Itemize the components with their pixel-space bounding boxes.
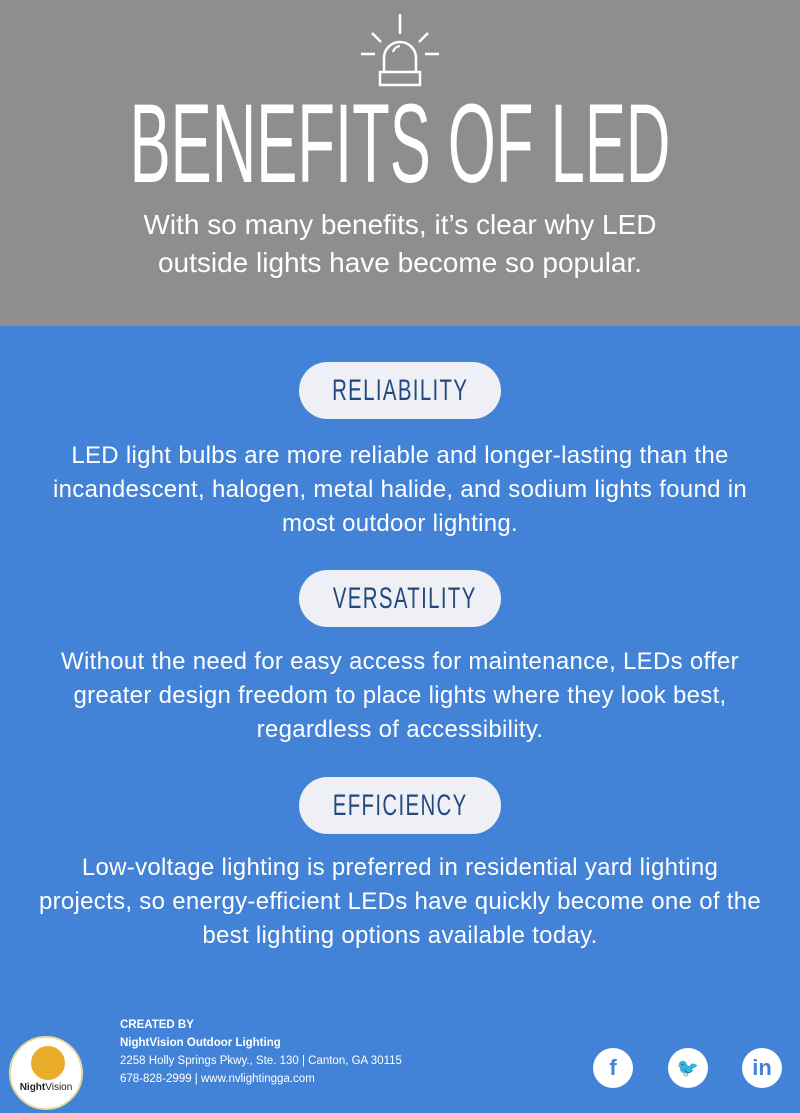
text: reliability: incandescent, halogen, metal halide, and sodium lights found in — [53, 476, 747, 503]
footer credits — [120, 1019, 402, 1085]
text: efficiency — [39, 854, 761, 949]
text: reliability: LED light bulbs are more reliable and longer-lasting than the — [71, 442, 729, 469]
footer credits: CREATED BY — [120, 1019, 194, 1031]
header panel — [0, 0, 800, 326]
icon: linkedin: in — [752, 1055, 772, 1080]
logo: NightVision: NightVision — [20, 1082, 72, 1093]
pill: versatility: VERSATILITY — [333, 582, 477, 615]
icon: facebook — [593, 1048, 633, 1088]
icon: linkedin — [742, 1048, 782, 1088]
pill: efficiency — [299, 777, 501, 834]
title: BENEFITS OF LED — [130, 81, 670, 206]
pill: reliability — [299, 362, 501, 419]
text: efficiency: Low-voltage lighting is preferred in residential yard lighting — [82, 854, 718, 881]
icon: siren light — [361, 14, 439, 86]
footer credits: 678-828-2999 | www.nvlightingga.com — [120, 1073, 315, 1085]
subtitle: outside lights have become so popular. — [158, 247, 642, 278]
pill: efficiency: EFFICIENCY — [333, 789, 467, 822]
pill: versatility — [299, 570, 501, 627]
text: versatility — [61, 648, 739, 743]
logo: NightVision — [9, 1036, 83, 1110]
text: efficiency: best lighting options available today. — [202, 922, 598, 949]
icon: twitter: 🐦 — [677, 1058, 699, 1078]
text: versatility: Without the need for easy access for maintenance, LEDs offer — [61, 648, 739, 675]
text: efficiency: projects, so energy-efficient LEDs have quickly become one of the — [39, 888, 761, 915]
icon: facebook: f — [609, 1055, 617, 1080]
icon: twitter — [668, 1048, 708, 1088]
pill: reliability: RELIABILITY — [332, 374, 468, 407]
text: versatility: regardless of accessibility. — [257, 716, 543, 743]
subtitle — [143, 209, 656, 278]
footer credits: 2258 Holly Springs Pkwy., Ste. 130 | Canton, GA 30115 — [120, 1055, 402, 1067]
subtitle: With so many benefits, it’s clear why LED — [143, 209, 656, 240]
text: reliability — [53, 442, 747, 537]
text: reliability: most outdoor lighting. — [282, 510, 518, 537]
footer credits: NightVision Outdoor Lighting — [120, 1037, 281, 1049]
text: versatility: greater design freedom to place lights where they look best, — [73, 682, 727, 709]
